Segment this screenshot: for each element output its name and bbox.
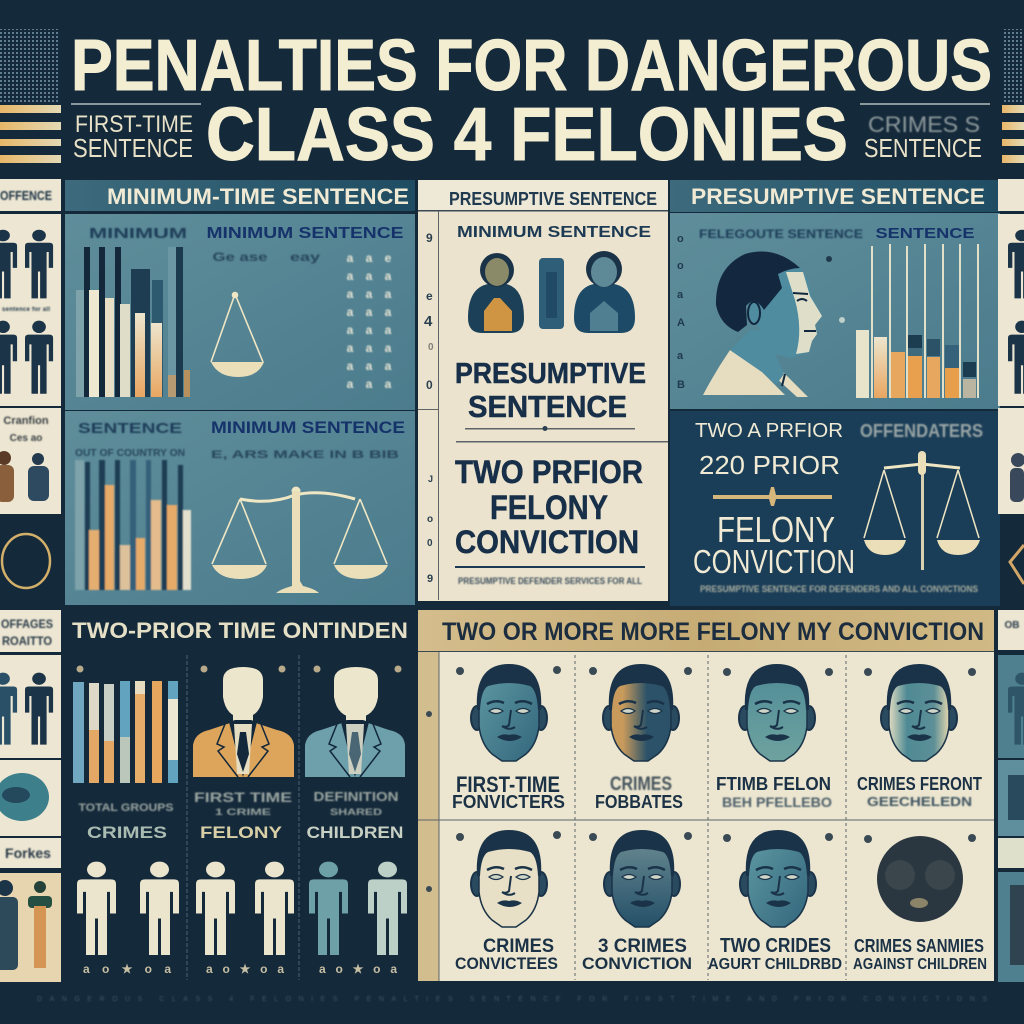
face: row 1 col 1 — [452, 664, 565, 812]
dot table: a — [385, 287, 392, 301]
icon: balance scale dark — [864, 451, 980, 570]
panel header: minimum-time sentence: MINIMUM-TIME SENTENCE — [107, 184, 409, 209]
center header: PRESUMPTIVE SENTENCE — [449, 189, 657, 209]
left subtitle: first-time sentence: SENTENCE — [73, 133, 193, 163]
face: row 2 col 4 dark circle: AGAINST CHILDREN — [853, 956, 987, 973]
panel: two prior felony conviction right: FELONY — [717, 509, 835, 550]
left margin marks: o — [427, 514, 433, 525]
dot table: a — [385, 323, 392, 337]
dot table: a — [366, 269, 373, 283]
dot table: a — [347, 305, 354, 319]
dot table: a — [347, 323, 354, 337]
bottom-right panel: faces grid — [418, 652, 994, 981]
left margin marks: 9 — [427, 573, 433, 585]
column captions: TOTAL GROUPS — [78, 802, 174, 814]
dot table: a — [385, 377, 392, 391]
right subtitle: crimes sentence — [860, 103, 990, 163]
face: row 2 col 3: AGURT CHILDRBD — [708, 956, 842, 973]
dot table: a — [366, 287, 373, 301]
panel: two prior felony conviction right — [670, 411, 1000, 606]
far-right bottom strip — [998, 610, 1024, 982]
right subtitle: crimes sentence: SENTENCE — [864, 133, 982, 163]
star rows: a o ★ o a — [206, 962, 284, 976]
face: row 1 col 4: CRIMES FERONT — [857, 774, 982, 794]
panel: presumptive sentence with profile — [670, 213, 1000, 409]
panel: presumptive sentence center: SENTENCE — [468, 389, 627, 424]
bottom-left strip: OFFAGES — [1, 617, 53, 631]
left margin marks: 0 — [428, 342, 434, 353]
left margin marks: e — [426, 289, 433, 303]
panel: presumptive sentence center: CONVICTION — [455, 524, 639, 560]
decorative left stripes — [0, 105, 61, 163]
face: row 1 col 3: FTIMB FELON — [716, 774, 831, 794]
margin marks: o — [677, 260, 684, 272]
panel: presumptive sentence with profile: SENTENCE — [876, 225, 974, 242]
dot table: a — [385, 269, 392, 283]
icon: teal suit figure — [305, 667, 405, 777]
left subtitle: first-time sentence — [71, 103, 201, 163]
left margin marks: 0 — [426, 378, 433, 392]
dot table: a — [385, 359, 392, 373]
dot table: a — [347, 377, 354, 391]
left side strip: top: Ces ao — [10, 433, 42, 444]
face: row 2 col 2: CONVICTION — [582, 954, 692, 973]
panel header: presumptive sentence right: PRESUMPTIVE SENTENCE — [691, 184, 985, 209]
face: row 2 col 2: 3 CRIMES — [598, 936, 687, 957]
bottom-right header: two or more felony conviction: TWO OR MORE MORE FELONY MY CONVICTION — [442, 618, 984, 646]
panel: two prior felony conviction right: PRESUMPTIVE SENTENCE FOR DEFENDERS AND ALL CONVICTIONS — [700, 584, 978, 594]
column heading: children: CHILDREN — [306, 823, 404, 842]
column captions — [78, 789, 398, 817]
icon: man profile — [703, 251, 822, 397]
bottom-left panel: two-prior time offender: TWO-PRIOR TIME ONTINDEN — [72, 618, 408, 643]
column captions: SHARED — [330, 807, 383, 817]
left margin marks: 9 — [426, 231, 433, 245]
decorative top-right dot pattern — [1002, 29, 1024, 103]
panel: minimum sentence bottom: MINIMUM SENTENCE — [211, 418, 405, 437]
margin marks: A — [677, 317, 685, 329]
left subtitle: first-time sentence: FIRST-TIME — [75, 111, 193, 138]
panel: minimum sentence bottom: E, ARS MAKE IN B BIB — [211, 449, 399, 461]
dot table: a — [366, 251, 373, 265]
bottom-left strip: Forkes — [5, 845, 51, 861]
margin marks — [677, 233, 685, 391]
panel: two prior felony conviction right: OFFENDATERS — [860, 421, 983, 441]
center header — [418, 180, 668, 212]
icon: two figures with document — [468, 251, 635, 333]
left side strip: top — [0, 179, 61, 588]
far-right bottom strip: OB — [1004, 620, 1020, 631]
title: CLASS 4 FELONIES — [206, 92, 848, 176]
bar chart: bottom — [75, 460, 191, 590]
right side strip — [998, 179, 1024, 584]
face: row 1 col 3: BEH PFELLEBO — [722, 794, 832, 810]
face: row 2 col 1: CRIMES — [483, 936, 554, 957]
face: row 1 col 2 — [595, 664, 683, 812]
dot table: a — [366, 341, 373, 355]
left side strip: top: OFFENCE — [0, 188, 52, 203]
icon: balance scale — [212, 487, 388, 593]
dot table: e — [385, 251, 392, 265]
dot table: a — [385, 305, 392, 319]
column captions: DEFINITION — [314, 789, 398, 804]
face: row 1 col 3 — [716, 664, 832, 810]
face: row 1 col 4 — [857, 664, 982, 809]
small dots — [76, 666, 402, 672]
dot table: a — [347, 269, 354, 283]
left margin marks: 4 — [424, 313, 433, 330]
bar chart: top — [76, 247, 190, 397]
panel: two prior felony conviction right: 220 PRIOR — [699, 450, 840, 480]
star rows: a o ★ o a — [319, 962, 397, 976]
left margin marks — [424, 231, 434, 585]
left side strip: top: sentence for all — [2, 307, 50, 313]
face: row 1 col 2: FOBBATES — [595, 792, 683, 812]
face: row 2 col 4 dark circle — [853, 836, 987, 973]
star rows: a o ★ o a — [83, 962, 171, 976]
dot table: eay — [290, 250, 320, 264]
face: row 1 col 1: FONVICTERS — [452, 792, 565, 812]
panel: presumptive sentence center: FELONY — [490, 489, 608, 527]
column captions: FIRST TIME — [194, 789, 292, 805]
panel: two prior felony conviction right: CONVICTION — [693, 543, 855, 580]
panel: presumptive sentence center — [418, 180, 668, 601]
icon: tan suit figure — [193, 667, 294, 777]
corner marks — [426, 666, 976, 892]
dot table: a — [347, 359, 354, 373]
panel: presumptive sentence center: PRESUMPTIVE — [455, 358, 646, 390]
dot table: a — [366, 359, 373, 373]
face: row 2 col 4 dark circle: CRIMES SANMIES — [854, 936, 984, 956]
panel: minimum sentence top: MINIMUM SENTENCE — [206, 225, 404, 242]
dot table: a — [347, 341, 354, 355]
column heading: felony: FELONY — [200, 823, 283, 842]
decorative right stripes — [1002, 105, 1024, 163]
panel: presumptive sentence center: TWO PRFIOR — [455, 454, 643, 490]
footer fine print: DANGEROUS CLASS 4 FELONIES PENALTIES SENTENCE FOR FIRST TIME AND PRIOR CONVICTIONS — [37, 996, 987, 1003]
people icons — [77, 862, 407, 955]
face: row 1 col 2: CRIMES — [610, 774, 672, 795]
panel: minimum sentence top: MINIMUM — [89, 225, 187, 242]
icon: single scale — [211, 292, 264, 377]
panel: minimum sentence bottom: SENTENCE — [78, 420, 182, 437]
margin marks: o — [677, 233, 684, 245]
bottom-right header: two or more felony conviction — [418, 610, 994, 652]
right subtitle: crimes sentence: CRIMES S — [868, 112, 980, 137]
dot table: a — [366, 323, 373, 337]
face: row 1 col 4: GEECHELEDN — [867, 794, 972, 809]
left margin marks: 0 — [427, 538, 433, 549]
panel: presumptive sentence center: MINIMUM SENTENCE — [457, 224, 651, 241]
face: row 1 col 1: FIRST-TIME — [456, 772, 560, 797]
title — [71, 26, 992, 176]
panel: minimum sentence top — [65, 214, 415, 410]
left margin marks: J — [428, 474, 433, 484]
divider ornament — [713, 487, 832, 506]
bottom-left panel: two-prior time offender — [72, 618, 408, 980]
face: row 2 col 3: TWO CRIDES — [720, 935, 831, 957]
bottom-left strip: ROAITTO — [2, 634, 52, 648]
panel: minimum sentence bottom — [65, 411, 415, 605]
dot table: a — [347, 251, 354, 265]
star rows — [83, 962, 397, 976]
dividers — [187, 655, 299, 980]
margin marks: a — [677, 350, 684, 362]
dot table: a — [347, 287, 354, 301]
panel header: presumptive sentence right — [670, 180, 1000, 212]
bar chart: bottom-left — [73, 681, 178, 783]
dot table — [212, 250, 392, 391]
panel header: minimum-time sentence — [65, 180, 415, 211]
panel: presumptive sentence center: PRESUMPTIVE DEFENDER SERVICES FOR ALL — [458, 576, 642, 586]
bar chart: right — [856, 244, 979, 398]
dot table: a — [366, 305, 373, 319]
panel: two prior felony conviction right: TWO A PRFIOR — [695, 420, 843, 442]
face: row 2 col 1 — [455, 830, 558, 973]
dot table: a — [366, 377, 373, 391]
bottom-left strip — [0, 610, 61, 982]
left side strip: top: Cranfion — [3, 415, 49, 427]
face: row 2 col 1: CONVICTEES — [455, 954, 558, 973]
face: row 2 col 3 — [708, 830, 842, 973]
column heading: crimes: CRIMES — [87, 823, 167, 842]
panel: minimum sentence bottom: OUT OF COUNTRY ON — [75, 448, 185, 459]
column captions: 1 CRIME — [215, 807, 271, 817]
margin marks: a — [677, 289, 684, 301]
dot table: a — [385, 341, 392, 355]
face: row 2 col 2 — [582, 830, 692, 973]
panel: presumptive sentence with profile: FELEGOUTE SENTENCE — [699, 227, 863, 241]
margin marks: B — [677, 379, 685, 391]
decorative top-left dot pattern — [0, 29, 58, 103]
dot table: Ge ase — [212, 250, 268, 264]
